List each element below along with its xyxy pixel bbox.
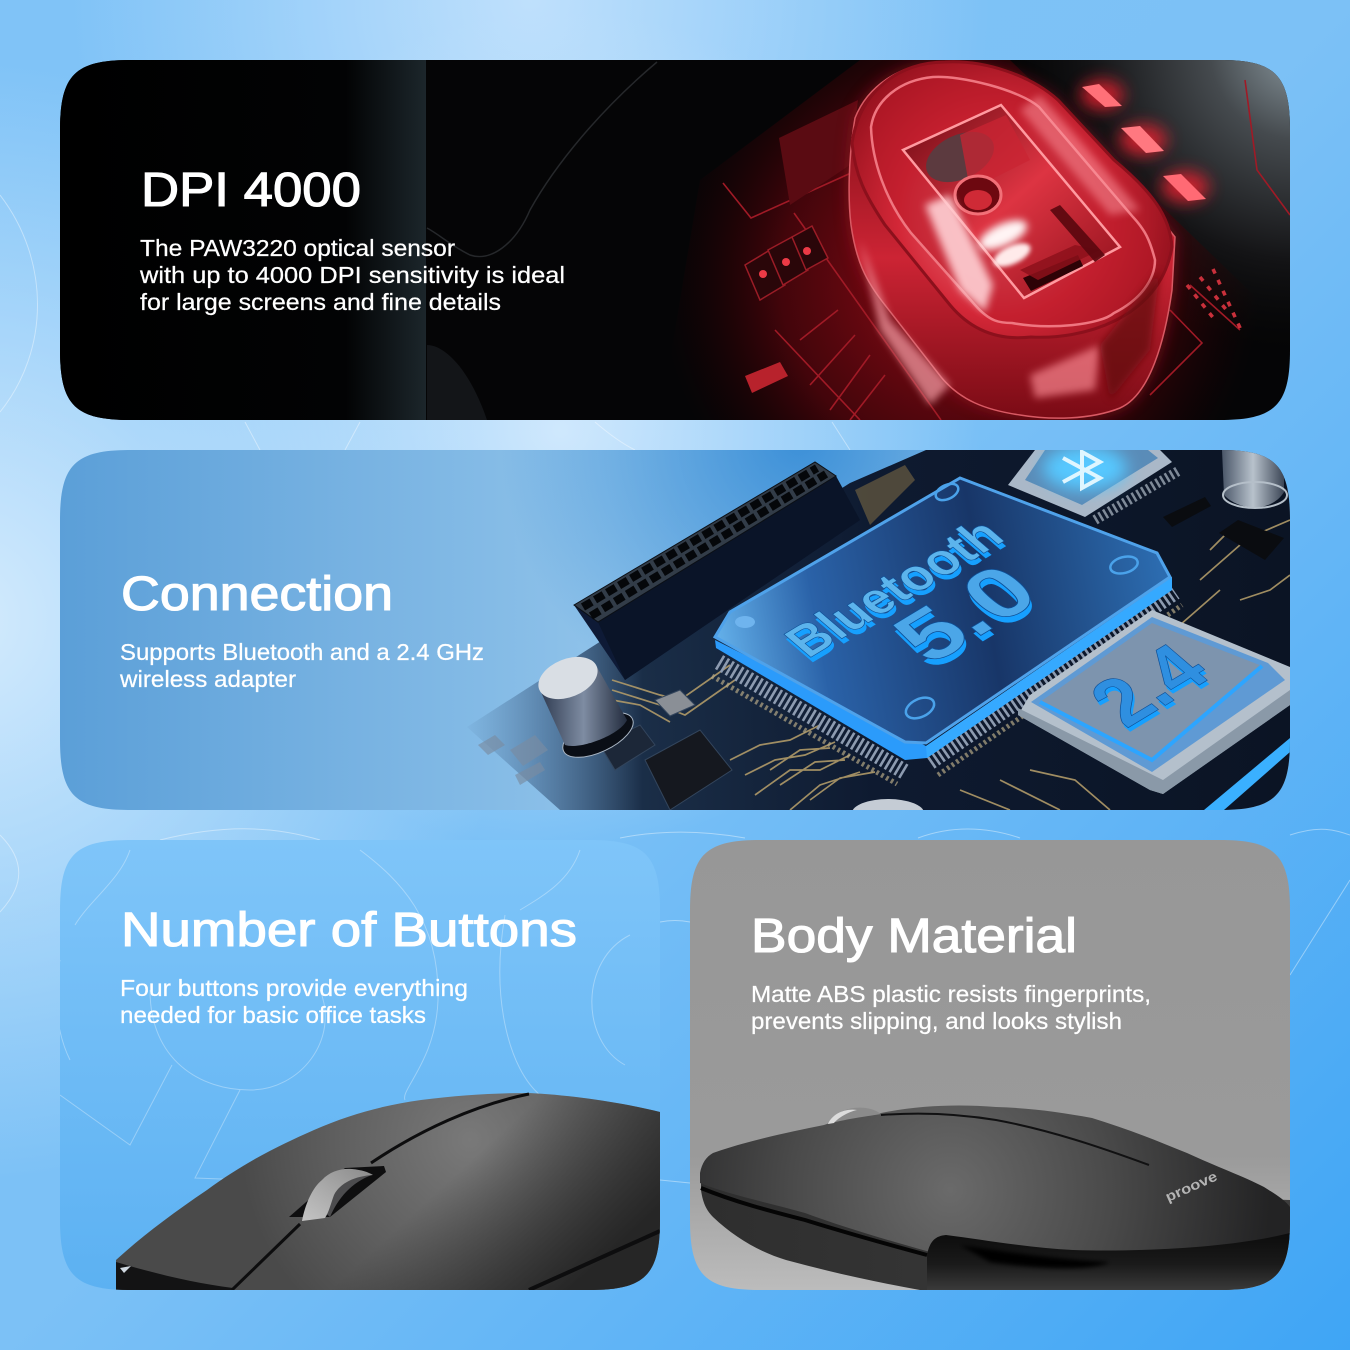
mouse close-up	[116, 1093, 660, 1290]
capacitor	[532, 649, 640, 766]
heading: Body Material	[751, 910, 1077, 963]
small components	[600, 690, 732, 810]
LED indicators	[1080, 80, 1209, 203]
main chip: Bluetooth 5.0: Bluetooth	[773, 510, 1016, 667]
mouse body contour	[427, 62, 657, 257]
mouse side view	[700, 1105, 1290, 1290]
brand mark: proove	[1163, 1168, 1220, 1205]
panel: body material	[690, 840, 1290, 1290]
5.0 label: 5.0	[876, 556, 1059, 684]
main chip: Bluetooth 5.0: 5.0	[874, 550, 1057, 678]
chip: 2.4: 2.4	[1073, 633, 1228, 744]
description	[119, 639, 484, 692]
small chips	[745, 226, 828, 300]
capacitor top right	[1222, 450, 1287, 508]
gold speckle	[855, 465, 915, 525]
lower silver part	[852, 799, 924, 827]
connector	[574, 462, 860, 680]
heading: Number of Buttons	[121, 904, 577, 957]
red optical lens	[849, 62, 1175, 418]
description	[120, 975, 468, 1028]
heading: DPI 4000	[141, 164, 361, 217]
chip pins	[712, 592, 1182, 784]
description: Supports Bluetooth and a 2.4 GHz	[120, 639, 484, 665]
chip pins upper	[1095, 470, 1180, 520]
Bluetooth label: Bluetooth	[775, 515, 1018, 672]
main chip: Bluetooth 5.0	[715, 478, 1172, 760]
chip: 2.4: 2.4	[1071, 629, 1226, 740]
description: needed for basic office tasks	[120, 1002, 426, 1028]
description: for large screens and fine details	[140, 289, 501, 315]
description: with up to 4000 DPI sensitivity is ideal	[139, 262, 565, 288]
description: The PAW3220 optical sensor	[140, 235, 455, 261]
panel: DPI 4000	[60, 60, 1290, 420]
scroll wheel	[289, 1166, 386, 1221]
chip: 2.4	[1018, 610, 1290, 794]
left fade strip	[60, 60, 426, 420]
bumper	[927, 1233, 1290, 1290]
description: prevents slipping, and looks stylish	[751, 1008, 1122, 1034]
description: Matte ABS plastic resists fingerprints,	[751, 981, 1151, 1007]
circuit board	[467, 450, 1290, 810]
scroll wheel	[828, 1108, 881, 1124]
neon strip	[1204, 738, 1290, 810]
circuit board glow	[690, 60, 1227, 420]
panel: connection	[60, 446, 1290, 827]
right contacts	[1187, 269, 1241, 330]
description	[751, 981, 1151, 1034]
description: Four buttons provide everything	[120, 975, 468, 1001]
traces	[612, 520, 1290, 810]
Bluetooth module	[1008, 446, 1172, 517]
panel: number of buttons	[56, 840, 660, 1290]
description	[139, 235, 565, 315]
red capsule component	[745, 362, 788, 393]
description: wireless adapter	[119, 666, 296, 692]
heading: Connection	[121, 568, 393, 621]
circuit traces	[723, 80, 1290, 420]
